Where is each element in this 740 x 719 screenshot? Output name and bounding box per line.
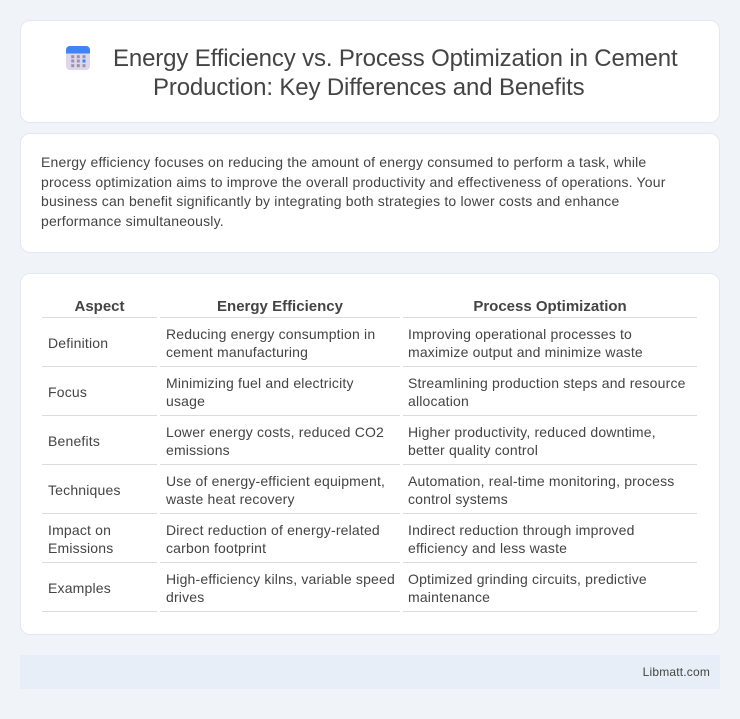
cell: Impact on Emissions, energy efficiency: carbon footprint [166,540,266,556]
column heading: Energy Efficiency: Energy Efficiency [217,298,343,315]
cell: Benefits, process optimization: Higher productivity, reduced downtime, [408,424,656,440]
row: Benefits: Benefits [48,433,100,449]
title [113,45,678,101]
cell: Definition, process optimization: maximize output and minimize waste [408,344,643,360]
cell: Benefits, energy efficiency: Lower energy costs, reduced CO2 [166,424,384,440]
icon: calendar [66,46,90,70]
cell: Examples, energy efficiency: drives [166,589,204,605]
cell: Examples, process optimization [408,571,647,605]
cell: Techniques, energy efficiency [166,473,385,507]
footer text: Libmatt.com [643,665,710,679]
cell: Benefits, energy efficiency: emissions [166,442,230,458]
row: Impact on Emissions: Emissions [48,540,113,556]
cell: Impact on Emissions, process optimization [408,522,635,556]
intro text [41,154,666,229]
cell: Examples, process optimization: maintenance [408,589,490,605]
row: Techniques: Techniques [48,482,121,498]
cell: Benefits, process optimization [408,424,656,458]
intro text: Energy efficiency focuses on reducing the amount of energy consumed to perform a task, while [41,154,646,170]
cell: Techniques, process optimization [408,473,674,507]
row: Focus: Focus [48,384,87,400]
title: Energy Efficiency vs. Process Optimization in Cement [113,45,678,72]
cell: Focus, energy efficiency [166,375,354,409]
cell: Focus, process optimization: Streamlining production steps and resource [408,375,686,391]
intro text: process optimization aims to improve the overall productivity and effectiveness of operations. Your [41,174,666,190]
cell: Impact on Emissions, energy efficiency: Direct reduction of energy-related [166,522,380,538]
cell: Impact on Emissions, process optimization: Indirect reduction through improved [408,522,635,538]
column heading: Process Optimization: Process Optimization [473,298,627,315]
row: Impact on Emissions: Impact on [48,522,111,538]
footer bar [20,655,720,689]
cell: Definition, energy efficiency [166,326,375,360]
cell: Definition, energy efficiency: cement manufacturing [166,344,308,360]
row: Definition: Definition [48,335,108,351]
comparison table [42,298,697,612]
cell: Definition, energy efficiency: Reducing energy consumption in [166,326,375,342]
cell: Definition, process optimization: Improving operational processes to [408,326,632,342]
panel: header card [20,20,720,123]
cell: Techniques, process optimization: Automation, real-time monitoring, process [408,473,674,489]
title: Production: Key Differences and Benefits [153,74,585,101]
cell: Focus, process optimization [408,375,686,409]
intro text: business can benefit significantly by integrating both strategies to lower costs and enhance [41,193,619,209]
cell: Definition, process optimization [408,326,643,360]
cell: Techniques, process optimization: control systems [408,491,508,507]
intro text: performance simultaneously. [41,212,224,228]
row: Examples: Examples [48,580,111,596]
cell: Focus, energy efficiency: usage [166,393,205,409]
cell: Impact on Emissions, energy efficiency [166,522,380,556]
cell: Techniques, energy efficiency: waste heat recovery [166,491,295,507]
row: Impact on Emissions [48,522,113,556]
column heading: Aspect: Aspect [74,298,125,315]
cell: Benefits, energy efficiency [166,424,384,458]
cell: Focus, energy efficiency: Minimizing fuel and electricity [166,375,354,391]
cell: Examples, energy efficiency [166,571,395,605]
cell: Focus, process optimization: allocation [408,393,469,409]
panel: comparison table card [20,273,720,635]
cell: Impact on Emissions, process optimization: efficiency and less waste [408,540,567,556]
cell: Examples, process optimization: Optimized grinding circuits, predictive [408,571,647,587]
cell: Techniques, energy efficiency: Use of energy-efficient equipment, [166,473,385,489]
cell: Benefits, process optimization: better quality control [408,442,538,458]
cell: Examples, energy efficiency: High-efficiency kilns, variable speed [166,571,395,587]
panel: intro text card [20,133,720,253]
